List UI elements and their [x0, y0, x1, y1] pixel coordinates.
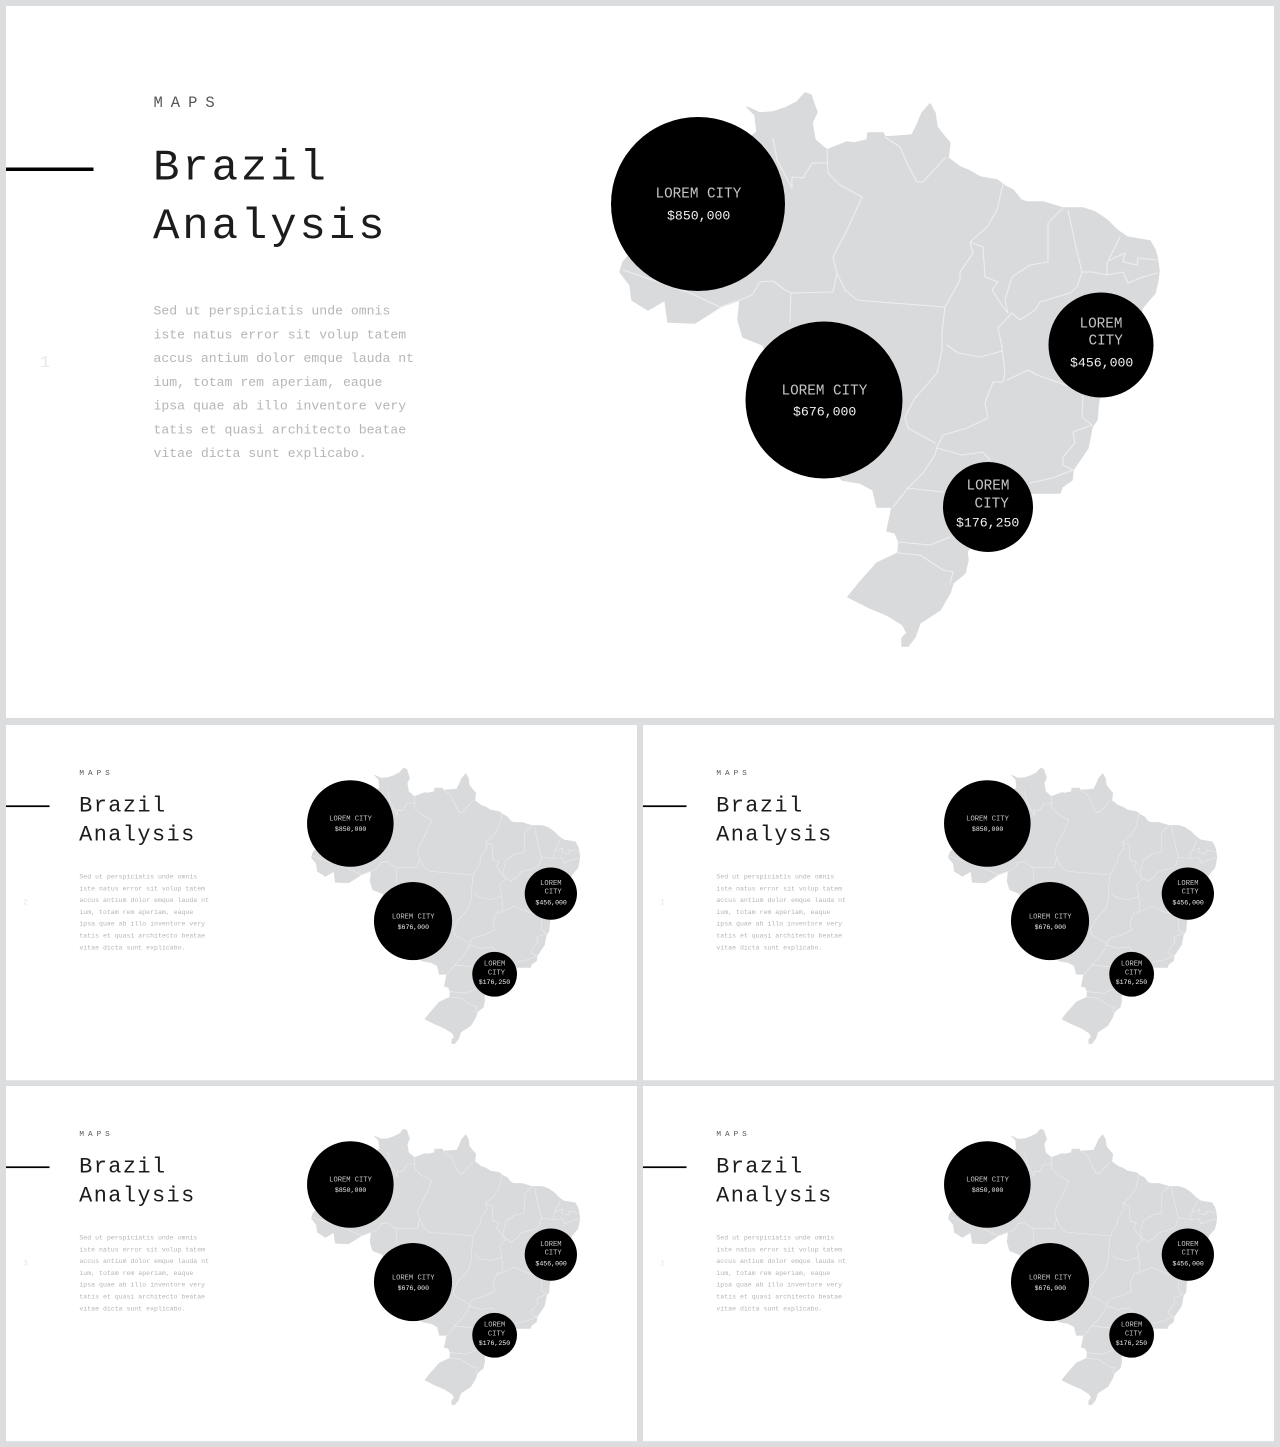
panel: thumbnail slide bottom left: MAPS: [79, 1131, 114, 1139]
panel: thumbnail slide bottom right: LOREM CITY: [1029, 1274, 1072, 1282]
panel: thumbnail slide top right: $456,000: [1172, 899, 1204, 906]
panel: thumbnail slide top left: CITY: [488, 970, 506, 978]
panel: thumbnail slide top left: LOREM CITY: [329, 815, 373, 823]
heading: Brazil: [153, 144, 329, 194]
panel: thumbnail slide top right: LOREM: [1177, 880, 1199, 888]
panel: thumbnail slide top left: Sed ut perspiciatis unde omnis: [79, 873, 197, 880]
panel: thumbnail slide bottom right: Brazil: [716, 1154, 804, 1179]
panel: thumbnail slide top left: $850,000: [335, 826, 366, 833]
bubble: city 176,250: CITY: [974, 496, 1009, 512]
body text: tatis et quasi architecto beatae: [154, 422, 406, 437]
panel: thumbnail slide bottom right: ipsa quae ab illo inventore very: [716, 1282, 842, 1289]
body text: iste natus error sit volup tatem: [154, 327, 406, 342]
panel: thumbnail slide bottom right: Analysis: [716, 1183, 833, 1208]
panel: thumbnail slide top left: vitae dicta sunt explicabo.: [79, 944, 185, 951]
panel: thumbnail slide bottom right: iste natus error sit volup tatem: [716, 1246, 842, 1253]
panel: thumbnail slide top left: 2: [23, 898, 28, 908]
panel: thumbnail slide top left: MAPS: [79, 770, 114, 778]
panel: thumbnail slide top left: $676,000: [398, 924, 429, 931]
body text: Sed ut perspiciatis unde omnis: [154, 303, 390, 318]
panel: main slide: [6, 6, 1274, 718]
panel: thumbnail slide bottom left: LOREM: [484, 1322, 505, 1330]
panel: thumbnail slide top left: ipsa quae ab illo inventore very: [79, 921, 205, 928]
panel: thumbnail slide top left: Analysis: [79, 822, 196, 847]
panel: thumbnail slide bottom left: CITY: [545, 1249, 562, 1257]
map of Brazil: [620, 93, 1159, 646]
panel: thumbnail slide top right: accus antium dolor emque lauda nt: [716, 897, 846, 904]
panel: thumbnail slide top right: LOREM CITY: [966, 815, 1010, 823]
bubble: city 176,250: $176,250: [956, 516, 1019, 530]
bubble: city 676,000: $676,000: [793, 404, 856, 420]
panel: thumbnail slide top left: iste natus error sit volup tatem: [79, 885, 205, 892]
panel: thumbnail slide top right: ium, totam rem aperiam, eaque: [716, 909, 830, 916]
bubble: city 456,000: CITY: [1088, 334, 1123, 350]
panel: thumbnail slide bottom left: LOREM CITY: [392, 1274, 435, 1282]
bubble: city 176,250: [943, 462, 1033, 552]
panel: thumbnail slide top right: ipsa quae ab illo inventore very: [716, 921, 842, 928]
panel: thumbnail slide top left: $176,250: [479, 979, 510, 986]
bubble: city 850,000: LOREM CITY: [656, 186, 742, 202]
panel: thumbnail slide bottom right: accus antium dolor emque lauda nt: [716, 1258, 846, 1265]
panel: thumbnail slide bottom left: ipsa quae ab illo inventore very: [79, 1282, 205, 1289]
panel: thumbnail slide top left: accus antium dolor emque lauda nt: [79, 897, 209, 904]
body text: ipsa quae ab illo inventore very: [154, 398, 406, 413]
body text: vitae dicta sunt explicabo.: [154, 446, 367, 461]
panel: thumbnail slide top right: [643, 725, 1274, 1080]
panel: thumbnail slide top left: CITY: [545, 888, 562, 896]
panel: thumbnail slide bottom right: $176,250: [1116, 1340, 1147, 1347]
panel: thumbnail slide top right: CITY: [1125, 970, 1143, 978]
panel: thumbnail slide bottom left: accus antium dolor emque lauda nt: [79, 1258, 209, 1265]
panel: thumbnail slide top right: $850,000: [972, 826, 1003, 833]
panel: thumbnail slide top right: LOREM CITY: [1029, 913, 1072, 921]
panel: thumbnail slide bottom left: $456,000: [535, 1260, 567, 1267]
bubble: city 850,000: [611, 117, 785, 291]
panel: thumbnail slide top right: LOREM: [1121, 961, 1142, 969]
panel: thumbnail slide top right: Brazil: [716, 793, 804, 818]
panel: thumbnail slide top right: iste natus error sit volup tatem: [716, 885, 842, 892]
page number: 1: [40, 354, 50, 373]
body text: accus antium dolor emque lauda nt: [154, 351, 414, 366]
bubble: city 176,250: LOREM: [966, 478, 1009, 494]
panel: thumbnail slide top right: 1: [660, 898, 665, 908]
panel: thumbnail slide bottom right: [643, 1086, 1274, 1441]
heading: Analysis: [153, 202, 387, 252]
panel: thumbnail slide bottom right: vitae dicta sunt explicabo.: [716, 1305, 822, 1312]
panel: thumbnail slide top left: tatis et quasi architecto beatae: [79, 933, 205, 940]
panel: thumbnail slide top right: tatis et quasi architecto beatae: [716, 933, 842, 940]
panel: thumbnail slide bottom left: 3: [23, 1259, 28, 1269]
panel: thumbnail slide bottom left: LOREM: [540, 1241, 562, 1249]
panel: thumbnail slide bottom left: [6, 1086, 637, 1441]
panel: thumbnail slide bottom right: CITY: [1125, 1331, 1143, 1339]
panel: thumbnail slide bottom right: MAPS: [716, 1131, 751, 1139]
bubble: city 850,000: $850,000: [667, 208, 730, 224]
panel: thumbnail slide bottom right: $456,000: [1172, 1260, 1204, 1267]
panel: thumbnail slide bottom left: $176,250: [479, 1340, 510, 1347]
panel: thumbnail slide top left: $456,000: [535, 899, 567, 906]
panel: thumbnail slide top right: $676,000: [1035, 924, 1066, 931]
panel: thumbnail slide bottom left: LOREM CITY: [329, 1176, 373, 1184]
bubble: city 676,000: LOREM CITY: [782, 384, 868, 400]
panel: thumbnail slide bottom left: CITY: [488, 1331, 506, 1339]
panel: thumbnail slide bottom right: 1: [660, 1259, 665, 1269]
panel: thumbnail slide top right: Analysis: [716, 822, 833, 847]
panel: thumbnail slide top left: LOREM CITY: [392, 913, 435, 921]
panel: thumbnail slide top left: ium, totam rem aperiam, eaque: [79, 909, 193, 916]
panel: thumbnail slide top left: Brazil: [79, 793, 167, 818]
body text: ium, totam rem aperiam, eaque: [154, 375, 383, 390]
panel: thumbnail slide top right: Sed ut perspiciatis unde omnis: [716, 873, 834, 880]
panel: thumbnail slide bottom left: vitae dicta sunt explicabo.: [79, 1305, 185, 1312]
panel: thumbnail slide bottom left: Analysis: [79, 1183, 196, 1208]
panel: thumbnail slide top left: [6, 725, 637, 1080]
bubble: city 676,000: [746, 322, 902, 478]
panel: thumbnail slide bottom left: Sed ut perspiciatis unde omnis: [79, 1234, 197, 1241]
bubble: city 456,000: $456,000: [1070, 356, 1133, 370]
panel: thumbnail slide bottom right: LOREM: [1177, 1241, 1199, 1249]
panel: thumbnail slide top left: LOREM: [540, 880, 562, 888]
panel: thumbnail slide bottom left: iste natus error sit volup tatem: [79, 1246, 205, 1253]
panel: thumbnail slide bottom left: tatis et quasi architecto beatae: [79, 1294, 205, 1301]
panel: thumbnail slide top right: MAPS: [716, 770, 751, 778]
panel: thumbnail slide bottom right: CITY: [1182, 1249, 1199, 1257]
panel: thumbnail slide bottom right: tatis et quasi architecto beatae: [716, 1294, 842, 1301]
accent line: [6, 168, 94, 171]
panel: thumbnail slide bottom right: LOREM: [1121, 1322, 1142, 1330]
panel: thumbnail slide top left: LOREM: [484, 961, 505, 969]
panel: thumbnail slide bottom left: Brazil: [79, 1154, 167, 1179]
panel: thumbnail slide bottom right: Sed ut perspiciatis unde omnis: [716, 1234, 834, 1241]
panel: thumbnail slide top right: CITY: [1182, 888, 1199, 896]
panel: thumbnail slide bottom right: $850,000: [972, 1187, 1003, 1194]
panel: thumbnail slide top right: vitae dicta sunt explicabo.: [716, 944, 822, 951]
bubble: city 456,000: LOREM: [1080, 316, 1122, 332]
eyebrow label: MAPS: [154, 94, 223, 112]
panel: thumbnail slide bottom right: ium, totam rem aperiam, eaque: [716, 1270, 830, 1277]
panel: thumbnail slide bottom left: $850,000: [335, 1187, 366, 1194]
panel: thumbnail slide top right: $176,250: [1116, 979, 1147, 986]
panel: thumbnail slide bottom right: $676,000: [1035, 1285, 1066, 1292]
bubble: city 456,000: [1048, 292, 1154, 398]
panel: thumbnail slide bottom left: $676,000: [398, 1285, 429, 1292]
panel: thumbnail slide bottom right: LOREM CITY: [966, 1176, 1010, 1184]
panel: thumbnail slide bottom left: ium, totam rem aperiam, eaque: [79, 1270, 193, 1277]
